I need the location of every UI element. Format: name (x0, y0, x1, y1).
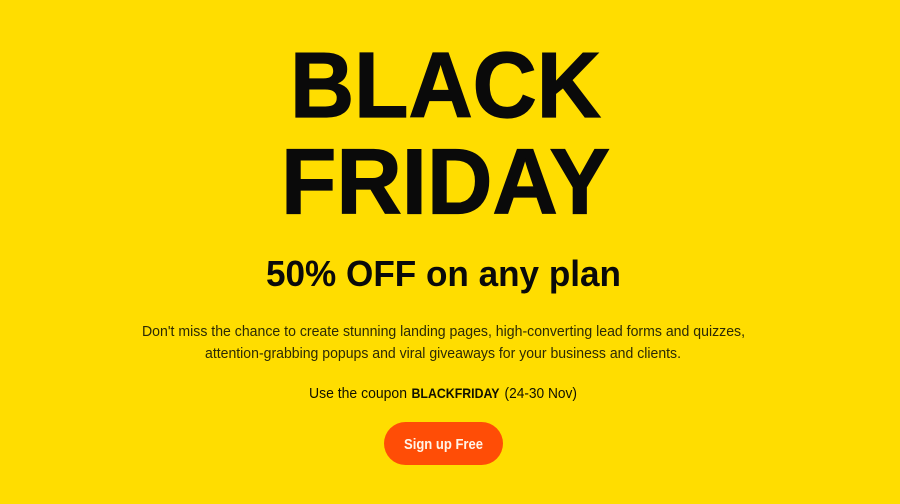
coupon line: BLACKFRIDAY (412, 385, 500, 401)
description text: attention-grabbing popups and viral giveaways for your business and clients. (205, 346, 681, 362)
coupon line: Use the coupon (309, 386, 407, 402)
subheading: discount: 50% OFF on any plan (266, 253, 621, 294)
title (281, 33, 610, 234)
description text (142, 324, 745, 362)
description text: Don't miss the chance to create stunning landing pages, high-converting lead forms and quizzes, (142, 324, 745, 340)
button: sign up: Sign up Free (404, 436, 483, 453)
button: sign up (384, 422, 503, 465)
title: BLACK (290, 33, 601, 137)
title: FRIDAY (281, 130, 610, 234)
coupon line: (24-30 Nov) (504, 386, 577, 402)
